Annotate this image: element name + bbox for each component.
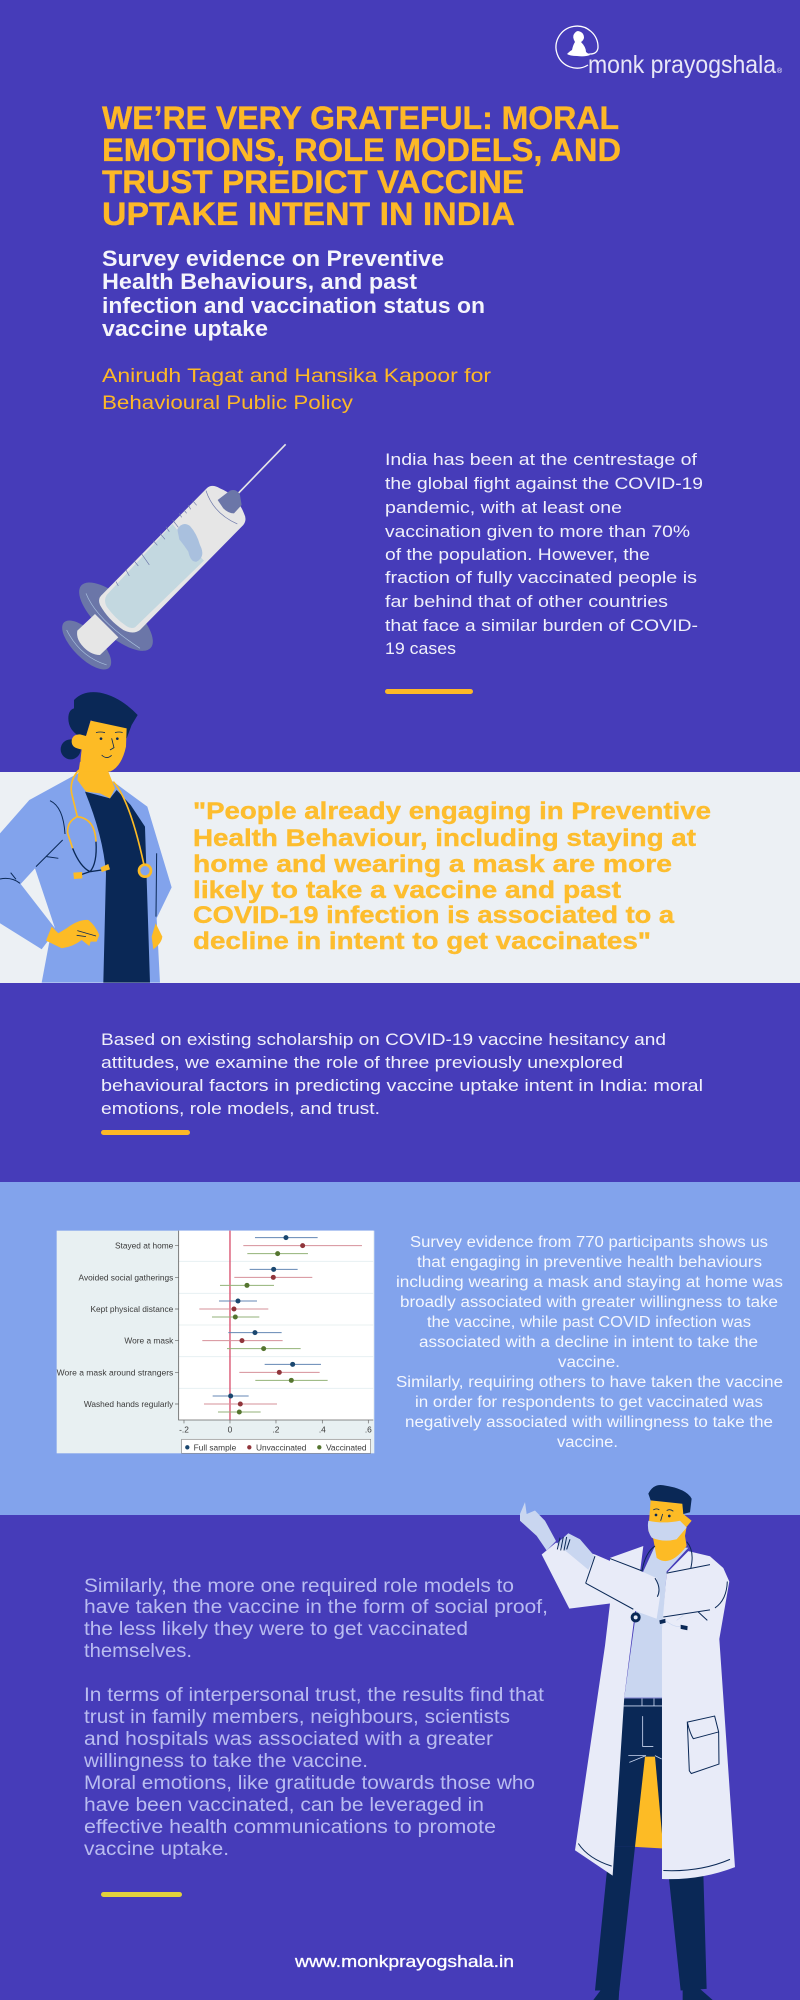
text block: role models and trust: In terms of interpersonal trust, the results find that: [84, 1685, 545, 1706]
intro paragraph: of the population. However, the: [385, 546, 650, 564]
chart: coefficient plot of preventive behaviours: 0: [228, 1425, 233, 1435]
text block: survey findings: broadly associated with greater willingness to take: [400, 1294, 778, 1311]
subtitle: infection and vaccination status on: [102, 293, 485, 318]
chart: coefficient plot of preventive behaviours: Full sample: [194, 1442, 237, 1452]
pull quote: COVID-19 infection is associated to a: [193, 902, 675, 929]
chart: coefficient plot of preventive behaviours: Unvaccinated: [256, 1442, 307, 1452]
chart: coefficient plot of preventive behaviours: Wore a mask around strangers: [57, 1367, 173, 1377]
text block: role models and trust: willingness to take the vaccine.: [83, 1751, 368, 1772]
text block: survey findings: associated with a decline in intent to take the: [419, 1334, 758, 1351]
title: [102, 100, 621, 232]
intro paragraph: [385, 451, 703, 658]
text block: survey findings: Survey evidence from 770 participants shows us: [410, 1234, 768, 1251]
text block: survey findings: negatively associated with willingness to take the: [405, 1414, 773, 1431]
text block: role models and trust: have been vaccinated, can be leveraged in: [84, 1795, 484, 1816]
illustration: male doctor with mask: [520, 1485, 735, 2000]
chart: coefficient plot of preventive behaviours: Avoided social gatherings: [79, 1272, 173, 1282]
intro paragraph: vaccination given to more than 70%: [385, 523, 690, 541]
chart: coefficient plot of preventive behaviours: -.2: [179, 1425, 189, 1435]
chart: coefficient plot of preventive behaviours: Vaccinated: [326, 1442, 367, 1452]
accent bar: [385, 689, 473, 694]
authors: [102, 366, 492, 414]
text block: survey findings: vaccine.: [558, 1354, 620, 1371]
intro paragraph: 19 cases: [385, 640, 456, 658]
pull quote: likely to take a vaccine and past: [193, 877, 621, 904]
panel: survey evidence band: [0, 1182, 800, 1515]
website url: www.monkprayogshala.in: [294, 1952, 514, 1971]
chart: coefficient plot of preventive behaviours: Wore a mask: [124, 1336, 174, 1346]
text block: survey findings: that engaging in preventive health behaviours: [417, 1254, 762, 1271]
text block: survey findings: the vaccine, while past COVID infection was: [427, 1314, 751, 1331]
title: WE’RE VERY GRATEFUL: MORAL: [102, 100, 619, 136]
chart: coefficient plot of preventive behaviours: Stayed at home: [115, 1241, 174, 1251]
text block: role models and trust: themselves.: [84, 1641, 192, 1662]
text block: role models and trust: trust in family members, neighbours, scientists: [84, 1707, 510, 1728]
text block: study scope: [101, 1031, 703, 1118]
intro paragraph: the global fight against the COVID-19: [385, 475, 703, 493]
logo: monk prayogshala: ®: [777, 67, 783, 75]
accent bar: [101, 1892, 182, 1897]
text block: role models and trust: [83, 1576, 548, 1860]
text block: study scope: Based on existing scholarship on COVID-19 vaccine hesitancy and: [101, 1031, 666, 1049]
title: EMOTIONS, ROLE MODELS, AND: [102, 132, 621, 168]
pull quote: [193, 798, 711, 955]
chart: coefficient plot of preventive behaviours: .4: [319, 1425, 326, 1435]
text block: study scope: attitudes, we examine the role of three previously unexplored: [101, 1054, 623, 1072]
text block: role models and trust: effective health communications to promote: [84, 1817, 496, 1838]
subtitle: [102, 246, 485, 341]
title: UPTAKE INTENT IN INDIA: [102, 196, 515, 232]
text block: survey findings: vaccine.: [557, 1434, 618, 1451]
text block: survey findings: including wearing a mask and staying at home was: [396, 1274, 783, 1291]
chart: coefficient plot of preventive behaviours: Kept physical distance: [90, 1304, 174, 1314]
chart: coefficient plot of preventive behaviours: Washed hands regularly: [84, 1399, 174, 1409]
text block: study scope: behavioural factors in predicting vaccine uptake intent in India: moral: [101, 1077, 703, 1095]
text block: role models and trust: vaccine uptake.: [84, 1839, 229, 1860]
intro paragraph: that face a similar burden of COVID-: [385, 617, 698, 635]
intro paragraph: pandemic, with at least one: [385, 499, 622, 517]
authors: Anirudh Tagat and Hansika Kapoor for: [102, 366, 492, 387]
text block: study scope: emotions, role models, and trust.: [101, 1100, 380, 1118]
text block: role models and trust: the less likely they were to get vaccinated: [84, 1619, 468, 1640]
chart: coefficient plot of preventive behaviours: .6: [365, 1425, 372, 1435]
text block: role models and trust: and hospitals was associated with a greater: [84, 1729, 494, 1750]
chart: coefficient plot of preventive behaviours: .2: [272, 1425, 280, 1435]
subtitle: Health Behaviours, and past: [102, 269, 418, 294]
subtitle: Survey evidence on Preventive: [102, 246, 444, 271]
pull quote: decline in intent to get vaccinates": [193, 928, 651, 955]
intro paragraph: fraction of fully vaccinated people is: [385, 569, 697, 587]
pull quote: "People already engaging in Preventive: [193, 798, 711, 825]
pull quote: Health Behaviour, including staying at: [193, 825, 696, 852]
illustration: woman doctor: [0, 692, 172, 983]
icon: syringe: [55, 444, 286, 677]
logo: monk prayogshala: [556, 26, 783, 79]
intro paragraph: India has been at the centrestage of: [385, 451, 697, 469]
panel: quote band: [0, 772, 800, 983]
chart: coefficient plot of preventive behaviours: [57, 1231, 374, 1453]
text block: survey findings: Similarly, requiring others to have taken the vaccine: [396, 1374, 783, 1391]
text block: role models and trust: Similarly, the more one required role models to: [84, 1576, 514, 1597]
pull quote: home and wearing a mask are more: [193, 851, 672, 878]
subtitle: vaccine uptake: [102, 316, 268, 341]
intro paragraph: far behind that of other countries: [385, 593, 668, 611]
text block: role models and trust: Moral emotions, like gratitude towards those who: [84, 1773, 535, 1794]
authors: Behavioural Public Policy: [102, 393, 354, 414]
text block: survey findings: [396, 1234, 783, 1451]
text block: role models and trust: have taken the vaccine in the form of social proof,: [84, 1597, 548, 1618]
accent bar: [101, 1130, 190, 1135]
text block: survey findings: in order for respondents to get vaccinated was: [415, 1394, 763, 1411]
title: TRUST PREDICT VACCINE: [102, 164, 524, 200]
logo: monk prayogshala: monk prayogshala: [588, 51, 776, 79]
